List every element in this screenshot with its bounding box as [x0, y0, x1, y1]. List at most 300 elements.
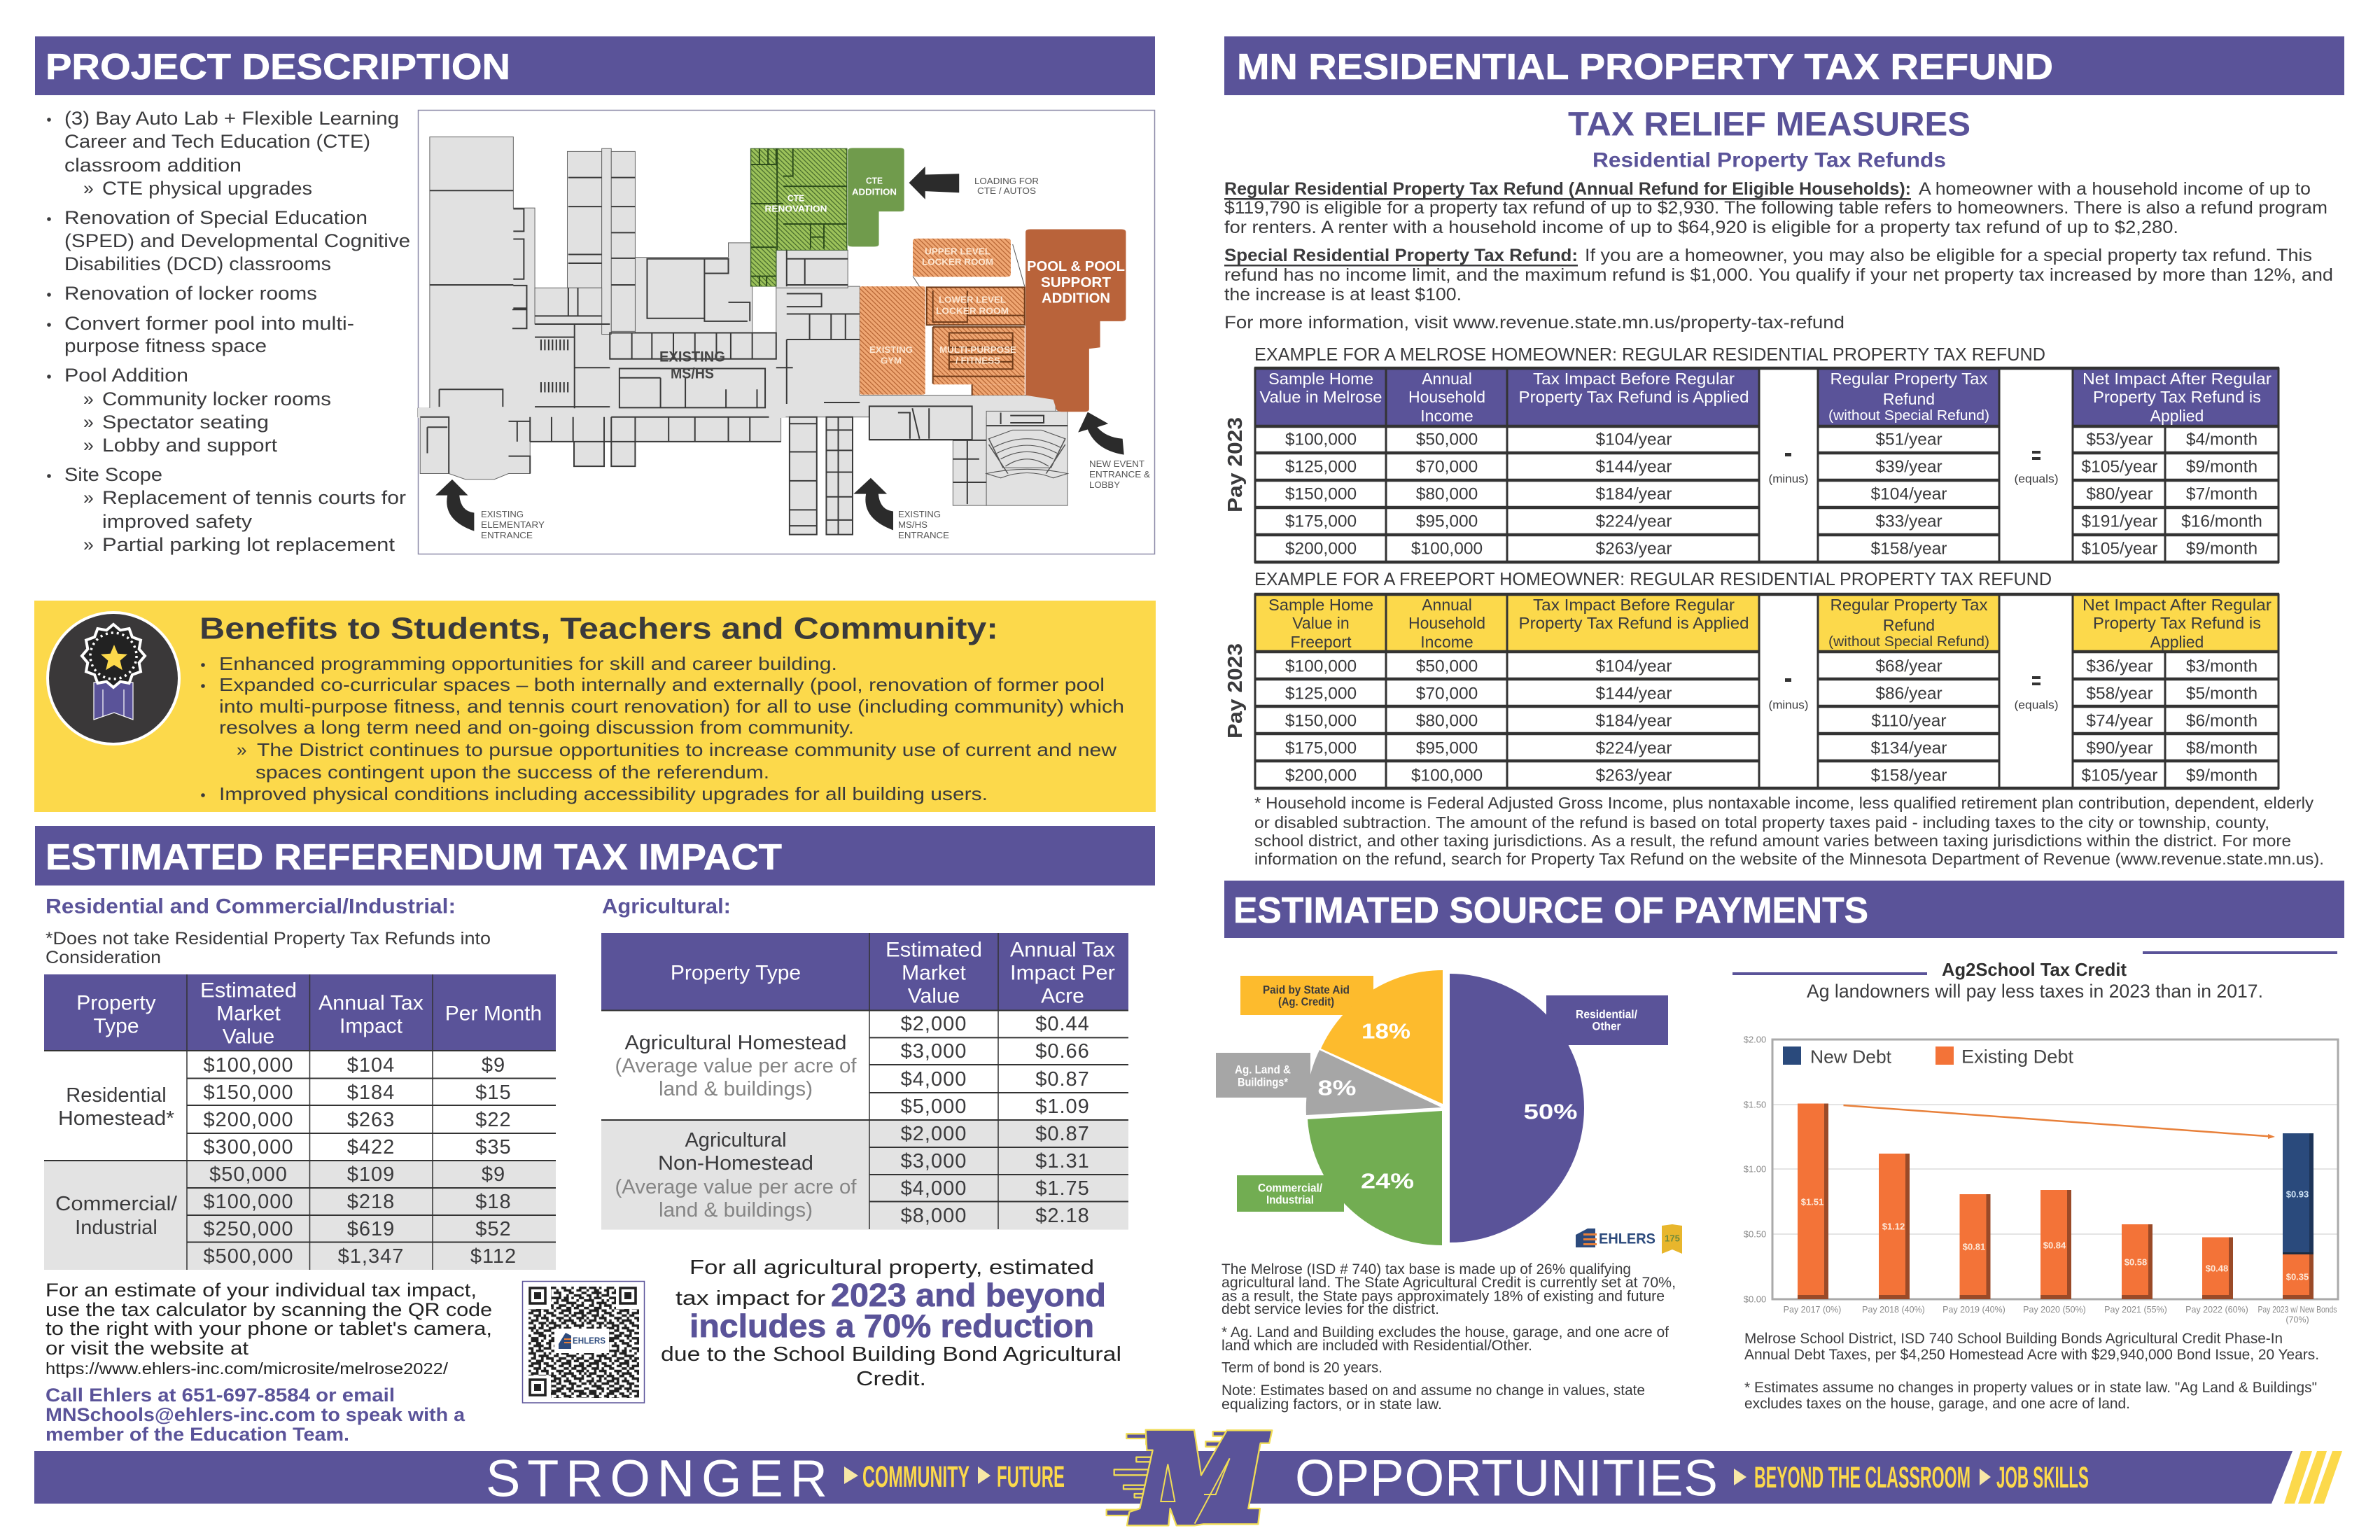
callout: contact Ehlers [46, 1385, 465, 1445]
text block: project scope bullets: » [83, 388, 94, 410]
map labels: EXISTING [481, 510, 524, 519]
table: Melrose homeowner example: Sample Home [1268, 370, 1373, 388]
table: agricultural tax impact: Agricultural Homestead [624, 1032, 847, 1054]
text block: refund explanation: for renters. A renter with a household income of up to $64,920 is eligible for a property tax refund of up to $2,280. [1224, 218, 2178, 237]
text block: household income footnote: information on the refund, search for Property Tax Refund on the website of the Minnesota Department of Revenue (www.revenue.state.mn.us). [1254, 850, 2324, 868]
map labels: EXISTING [869, 344, 913, 355]
text block: project scope bullets: Pool Addition [64, 365, 188, 386]
heading: Melrose example: EXAMPLE FOR A MELROSE HOMEOWNER: REGULAR RESIDENTIAL PROPERTY TAX REFUND [1254, 344, 2045, 365]
table: Melrose homeowner example: $4/month [2186, 430, 2258, 449]
text block: individual estimate instructions [46, 1280, 492, 1378]
heading: source of payments [1224, 881, 2344, 938]
table: agricultural tax impact: Annual Tax [1010, 938, 1115, 962]
table: residential and commercial tax impact: $200,000 [204, 1109, 293, 1131]
icon: award ribbon badge [48, 612, 179, 744]
table: agricultural tax impact: $8,000 [901, 1205, 967, 1227]
table: Freeport homeowner example: Income [1420, 633, 1474, 651]
pie chart: payment sources: Paid by State Aid [1263, 983, 1350, 997]
bar chart: Ag2School debt per acre: $0.35 [2286, 1271, 2309, 1282]
table: Freeport homeowner example: Refund [1883, 616, 1935, 634]
pie chart: payment sources [1216, 970, 1668, 1245]
bar chart: Ag2School debt per acre: $0.84 [2043, 1240, 2066, 1250]
table: Freeport homeowner example: $5/month [2186, 685, 2258, 703]
table: Freeport homeowner example: Annual [1422, 596, 1472, 614]
table: residential and commercial tax impact: Estimated [200, 979, 297, 1002]
table: Melrose homeowner example: Refund [1883, 390, 1935, 408]
table: Melrose homeowner example: $51/year [1875, 430, 1942, 449]
table: Melrose homeowner example: $105/year [2082, 458, 2157, 476]
panel: MN residential property tax refund [1224, 36, 2344, 868]
table: residential and commercial tax impact: $50,000 [209, 1163, 288, 1186]
text block: project scope bullets: » [83, 487, 94, 508]
panel: estimated source of payments [1216, 881, 2344, 1413]
heading: source of payments: ESTIMATED SOURCE OF PAYMENTS [1233, 890, 1868, 931]
table: Melrose homeowner example: $80/year [2086, 484, 2153, 504]
table: Freeport homeowner example: $184/year [1596, 711, 1672, 731]
table: Melrose homeowner example: Household [1408, 388, 1485, 406]
table: residential and commercial tax impact: $100,000 [204, 1054, 293, 1077]
callout: 70 percent reduction: tax impact for [676, 1287, 825, 1310]
text block: benefits bullets: Improved physical conditions including accessibility upgrades for all building users. [219, 783, 988, 804]
table: Melrose homeowner example: Net Impact After Regular [2082, 370, 2272, 388]
table: agricultural tax impact: Impact Per [1010, 962, 1115, 984]
text block: project scope bullets: » [83, 534, 94, 555]
callout: 70 percent reduction [661, 1256, 1121, 1390]
table: residential and commercial tax impact: $18 [475, 1191, 512, 1213]
table: agricultural tax impact: $1.09 [1035, 1096, 1090, 1118]
table: Melrose homeowner example: $100,000 [1411, 539, 1483, 559]
text block: tax base notes: The Melrose (ISD # 740) tax base is made up of 26% qualifying [1222, 1261, 1631, 1278]
pie chart: payment sources: Buildings* [1238, 1075, 1288, 1089]
text block: tax base notes: equalizing factors, or in state law. [1222, 1396, 1442, 1413]
table: residential and commercial tax impact: Type [93, 1015, 139, 1037]
map labels: LOCKER ROOM [936, 305, 1009, 316]
table: residential and commercial tax impact: Annual Tax [318, 991, 424, 1015]
table: Freeport homeowner example: $70,000 [1416, 685, 1478, 703]
logo: Ehlers [1576, 1224, 1682, 1254]
heading: tax refund [1224, 36, 2344, 95]
pool addition shape [1026, 229, 1126, 412]
text block: refund explanation: For more information, visit www.revenue.state.mn.us/property-tax-refund [1224, 313, 1844, 332]
text block: household income footnote: * Household income is Federal Adjusted Gross Income, plus nontaxable income, less qualified retirement plan contribution, dependent, elderly [1254, 794, 2314, 812]
map labels: ENTRANCE [898, 531, 949, 540]
table: residential and commercial tax impact: Homestead* [58, 1107, 174, 1130]
map labels [481, 175, 1151, 540]
label: Pay 2023 Freeport: Pay 2023 [1224, 643, 1247, 738]
table: residential and commercial tax impact: $52 [475, 1218, 512, 1240]
table: Freeport homeowner example: Value in [1292, 614, 1350, 632]
table: agricultural tax impact: (Average value per acre of [615, 1055, 857, 1077]
text block: project scope bullets: improved safety [102, 511, 253, 532]
text block: project scope bullets: Site Scope [64, 464, 162, 485]
text block: chart notes: Melrose School District, ISD 740 School Building Bonds Agricultural Credit Phase-In [1744, 1330, 2283, 1347]
table: Melrose homeowner example: $150,000 [1285, 484, 1357, 504]
table: Freeport homeowner example: Property Tax Refund is Applied [1519, 614, 1749, 632]
table: agricultural tax impact: $5,000 [901, 1096, 967, 1118]
text block: project scope bullets: Replacement of tennis courts for [102, 487, 406, 508]
table: Melrose homeowner example: Income [1420, 407, 1474, 425]
text block: individual estimate instructions: use the tax calculator by scanning the QR code [46, 1299, 492, 1320]
table: residential and commercial tax impact: Residential [66, 1084, 167, 1107]
subheading: residential and commercial: Residential and Commercial/Industrial: [46, 895, 456, 918]
text block: tax base notes: as a result, the State pays approximately 18% of existing and future [1222, 1288, 1665, 1305]
legend: Existing Debt [1961, 1046, 2073, 1067]
text block: tax base notes: debt service levies for the district. [1222, 1301, 1439, 1317]
green addition [848, 148, 904, 246]
table: Freeport homeowner example: Freeport [1291, 633, 1352, 651]
map labels: MULTI-PURPOSE [939, 344, 1016, 355]
table: agricultural tax impact: $3,000 [901, 1150, 967, 1172]
table: Freeport homeowner example: Net Impact After Regular [2082, 596, 2272, 614]
legend: New Debt [1810, 1046, 1892, 1067]
text block: refund explanation: Special Residential Property Tax Refund: [1224, 246, 1578, 265]
table: residential and commercial tax impact: $263 [347, 1109, 395, 1131]
table: agricultural tax impact: Value [908, 984, 960, 1008]
table: Melrose homeowner example: Property Tax Refund is Applied [1519, 388, 1749, 406]
callout: 70 percent reduction: includes a 70% reduction [690, 1308, 1094, 1344]
table: agricultural tax impact: $2,000 [901, 1123, 967, 1145]
table: Freeport homeowner example: Tax Impact Before Regular [1533, 596, 1735, 614]
table: Melrose homeowner example: $100,000 [1285, 430, 1357, 449]
table: agricultural tax impact: Property Type [671, 962, 801, 984]
table: agricultural tax impact: Agricultural [685, 1129, 787, 1152]
slogan: stronger: STRONGER [486, 1449, 827, 1508]
table: Freeport homeowner example: $9/month [2186, 766, 2258, 785]
table: residential and commercial tax impact: Per Month [445, 1002, 542, 1025]
table: Melrose homeowner example: $125,000 [1285, 458, 1357, 476]
table: Melrose homeowner example: $95,000 [1416, 512, 1478, 531]
table: agricultural tax impact: Estimated [886, 938, 982, 962]
text block: individual estimate instructions: For an estimate of your individual tax impact, [46, 1280, 477, 1301]
subheading: agricultural: Agricultural: [602, 895, 731, 918]
callout: 70 percent reduction: Credit. [856, 1368, 926, 1390]
map labels: GYM [881, 356, 902, 365]
table: residential and commercial tax impact: $500,000 [204, 1245, 293, 1268]
text block: chart notes: Annual Debt Taxes, per $4,250 Homestead Acre with $29,940,000 Bond Issue, 20 Years. [1744, 1346, 2319, 1363]
table: agricultural tax impact: $0.87 [1035, 1068, 1090, 1091]
table: agricultural tax impact: $2.18 [1035, 1205, 1090, 1227]
map labels: LOCKER ROOM [922, 256, 993, 267]
table: residential and commercial tax impact: $1,347 [338, 1245, 404, 1268]
map labels: LOBBY [1089, 480, 1121, 490]
M logo [1107, 1430, 1272, 1525]
table: agricultural tax impact: land & buildings) [659, 1078, 813, 1100]
auditorium seating [986, 430, 1068, 478]
table: Freeport homeowner example: $134/year [1871, 739, 1947, 757]
table: residential and commercial tax impact: Industrial [75, 1217, 158, 1239]
text block: tax base notes: * Ag. Land and Building excludes the house, garage, and one acre of [1222, 1324, 1669, 1340]
table: Melrose homeowner example: Applied [2150, 407, 2204, 425]
table: residential and commercial tax impact: $109 [347, 1163, 395, 1186]
map labels: ENTRANCE [481, 531, 533, 540]
map labels: POOL & POOL [1027, 259, 1125, 274]
heading: tax impact [35, 826, 1155, 886]
map labels: MS/HS [898, 520, 927, 530]
arrows [435, 167, 1124, 531]
note: refunds not considered [46, 929, 491, 967]
panel: benefits [34, 601, 1156, 812]
map labels: CTE / AUTOS [977, 186, 1036, 196]
text block: benefits bullets: The District continues to pursue opportunities to increase community use of current and new [257, 739, 1116, 760]
table: Freeport homeowner example: $95,000 [1416, 739, 1478, 757]
table: Freeport homeowner example: $100,000 [1411, 766, 1483, 785]
table: Freeport homeowner example: $125,000 [1285, 685, 1357, 703]
text block: refund explanation: A homeowner with a household income of up to [1919, 179, 2311, 199]
table: Melrose homeowner example: $33/year [1875, 512, 1942, 531]
bar chart: Ag2School debt per acre: $0.81 [1963, 1242, 1985, 1252]
floor plan map [418, 111, 1155, 554]
bar chart: Ag2School debt per acre: $0.48 [2206, 1263, 2228, 1274]
pie chart: payment sources: 24% [1361, 1169, 1414, 1193]
table: Freeport homeowner example: $74/year [2086, 711, 2153, 731]
text block: chart notes [1744, 1330, 2319, 1412]
table: agricultural tax impact: $0.66 [1035, 1040, 1090, 1063]
bar chart: Ag2School debt per acre: Pay 2018 (40%) [1862, 1305, 1925, 1315]
text block: tax base notes: Term of bond is 20 years. [1222, 1359, 1382, 1376]
table: agricultural tax impact: $4,000 [901, 1177, 967, 1200]
table: agricultural tax impact: $0.44 [1035, 1013, 1090, 1035]
map labels: ADDITION [1042, 291, 1110, 307]
table: Freeport homeowner example: $150,000 [1285, 711, 1357, 731]
table: residential and commercial tax impact: $218 [347, 1191, 395, 1213]
text block: project scope bullets: (SPED) and Developmental Cognitive [64, 230, 410, 251]
text block: refund explanation: Regular Residential Property Tax Refund (Annual Refund for Eligible Households): [1224, 179, 1911, 199]
text block: project scope bullets: Disabilities (DCD) classrooms [64, 253, 331, 274]
table: residential and commercial tax impact: $22 [475, 1109, 512, 1131]
subheading: residential property tax refunds: Residential Property Tax Refunds [1592, 148, 1946, 172]
table: residential and commercial tax impact [44, 974, 556, 1270]
table: Freeport homeowner example: $110/year [1871, 711, 1947, 731]
text block: individual estimate instructions: to the right with your phone or tablet's camera, [46, 1318, 492, 1339]
pie chart: payment sources: Commercial/ [1258, 1182, 1322, 1194]
table: agricultural tax impact: (Average value per acre of [615, 1176, 857, 1198]
table: Melrose homeowner example: $144/year [1596, 458, 1672, 476]
bar chart: Ag2School debt per acre: $1.51 [1801, 1197, 1823, 1207]
table: residential and commercial tax impact: $250,000 [204, 1218, 293, 1240]
table: Freeport homeowner example: $90/year [2086, 739, 2153, 757]
pie chart: payment sources: Other [1592, 1019, 1621, 1033]
text block: refund explanation: $119,790 is eligible for a property tax refund of up to $2,930. The following table refers to homeowners. There is also a refund program [1224, 198, 2328, 218]
table: Melrose homeowner example: $263/year [1596, 539, 1672, 559]
label: Pay 2023 Melrose: Pay 2023 [1224, 417, 1247, 512]
bar chart: Ag2School debt per acre: Pay 2021 (55%) [2104, 1305, 2167, 1315]
text block: individual estimate instructions: or visit the website at [46, 1338, 249, 1359]
table: agricultural tax impact: $1.31 [1035, 1150, 1090, 1172]
QR code: EHLERS [573, 1336, 606, 1345]
text block: project scope bullets: » [83, 178, 94, 199]
bar chart: Ag2School debt per acre: $1.00 [1744, 1163, 1766, 1175]
table: agricultural tax impact: Non-Homestead [658, 1152, 813, 1175]
pie chart: payment sources: Ag. Land & [1235, 1063, 1291, 1077]
map labels: CTE [866, 175, 883, 186]
text block: project scope bullets: » [83, 412, 94, 433]
heading: project description: PROJECT DESCRIPTION [46, 47, 510, 88]
table: Freeport homeowner example: $80,000 [1416, 711, 1478, 731]
text block: tax base notes: agricultural land. The State Agricultural Credit is currently set at 70%, [1222, 1274, 1676, 1291]
table: Melrose homeowner example: $158/year [1871, 539, 1947, 559]
note: refunds not considered: Consideration [46, 948, 161, 967]
table: Freeport homeowner example: Applied [2150, 633, 2204, 651]
table: residential and commercial tax impact: Value [223, 1025, 274, 1049]
text block: project scope bullets: purpose fitness space [64, 335, 267, 356]
table: Freeport homeowner example: $263/year [1596, 766, 1672, 785]
text block: refund explanation: the increase is at least $100. [1224, 285, 1462, 304]
table: Freeport homeowner example: Regular Property Tax [1830, 596, 1988, 614]
callout: 70 percent reduction: due to the School Building Bond Agricultural [661, 1343, 1121, 1366]
table: Melrose homeowner example: $184/year [1596, 484, 1672, 504]
callout: 70 percent reduction: For all agricultural property, estimated [690, 1256, 1094, 1279]
callout: 70 percent reduction: 2023 and beyond [831, 1277, 1106, 1313]
table: residential and commercial tax impact: Impact [340, 1015, 403, 1037]
heading: project description [35, 36, 1155, 95]
text block: project scope bullets: CTE physical upgrades [102, 178, 312, 199]
map labels: EXISTING [898, 510, 941, 519]
bar chart: Ag2School debt per acre: Pay 2023 w/ New Bonds [2258, 1305, 2337, 1315]
table: agricultural tax impact: $2,000 [901, 1013, 967, 1035]
table: residential and commercial tax impact: $300,000 [204, 1136, 293, 1158]
pie chart: payment sources: 18% [1362, 1019, 1410, 1043]
bar chart: Ag2School debt per acre [1744, 1035, 2338, 1324]
text block: benefits bullets: » [237, 739, 246, 760]
table: Freeport homeowner example: (equals) [2015, 699, 2058, 711]
map labels: SUPPORT [1041, 275, 1111, 290]
bleachers [541, 340, 568, 392]
table: residential and commercial tax impact: $112 [470, 1245, 517, 1268]
table: agricultural tax impact [601, 933, 1128, 1230]
table: residential and commercial tax impact: $619 [347, 1218, 395, 1240]
text block: project scope bullets [47, 108, 410, 555]
table: Freeport homeowner example: $200,000 [1285, 766, 1357, 785]
callout: contact Ehlers: member of the Education Team. [46, 1424, 349, 1445]
heading: Freeport example: EXAMPLE FOR A FREEPORT HOMEOWNER: REGULAR RESIDENTIAL PROPERTY TAX REFUND [1254, 568, 2052, 589]
text block: project scope bullets: Lobby and support [102, 435, 278, 456]
text block: refund explanation [1224, 179, 2333, 332]
map labels: MS/HS [671, 365, 714, 382]
heading: benefits: Benefits to Students, Teachers and Community: [200, 612, 998, 645]
table: Melrose homeowner example: $105/year [2082, 539, 2157, 559]
table: Melrose homeowner example: $7/month [2186, 484, 2258, 504]
text block: project scope bullets: Renovation of Special Education [64, 207, 368, 228]
table: Freeport homeowner example [1254, 594, 2279, 789]
slogan: beyond the classroom and job skills: BEYOND THE CLASSROOM [1754, 1461, 1970, 1494]
table: residential and commercial tax impact: Market [216, 1002, 281, 1025]
text block: benefits bullets: spaces contingent upon the success of the referendum. [255, 762, 769, 783]
text block: project scope bullets: » [83, 435, 94, 456]
pie chart: payment sources: (Ag. Credit) [1278, 995, 1334, 1008]
logo: Ehlers: EHLERS [1599, 1231, 1656, 1247]
table: Freeport homeowner example: Property Tax Refund is [2093, 614, 2261, 632]
map labels: UPPER LEVEL [925, 246, 990, 256]
table: Melrose homeowner example: (equals) [2015, 472, 2058, 486]
table: residential and commercial tax impact: $9 [482, 1163, 505, 1186]
table: residential and commercial tax impact: $9 [482, 1054, 505, 1077]
table: Melrose homeowner example: $224/year [1596, 512, 1672, 531]
table: agricultural tax impact: Market [902, 962, 967, 984]
chart title: Ag2School Tax Credit: Ag2School Tax Credit [1942, 959, 2127, 980]
table: Freeport homeowner example: $105/year [2082, 766, 2157, 785]
decorative yellow stripes [2284, 1451, 2342, 1504]
table: residential and commercial tax impact: $104 [347, 1054, 395, 1077]
table: Melrose homeowner example: $50,000 [1416, 430, 1478, 449]
table: residential and commercial tax impact: $150,000 [204, 1082, 293, 1104]
table: Freeport homeowner example: $104/year [1596, 657, 1672, 676]
text block: project scope bullets: Partial parking lot replacement [102, 534, 396, 555]
table: Melrose homeowner example: $104/year [1596, 430, 1672, 449]
logo: Ehlers: 175 [1665, 1233, 1680, 1243]
table: Freeport homeowner example: Sample Home [1268, 596, 1373, 614]
table: agricultural tax impact: $1.75 [1035, 1177, 1090, 1200]
map labels: RENOVATION [764, 203, 827, 214]
text block: benefits bullets: Enhanced programming opportunities for skill and career building. [219, 653, 837, 674]
text block: refund explanation: refund has no income limit, and the maximum refund is $1,000. You qualify if your net property tax increased by more than 12%, and [1224, 265, 2333, 285]
heading: tax impact: ESTIMATED REFERENDUM TAX IMPACT [46, 837, 782, 878]
text block: project scope bullets: Convert former pool into multi- [64, 313, 354, 334]
text block: individual estimate instructions: https://www.ehlers-inc.com/microsite/melrose2022/ [46, 1359, 449, 1378]
pie chart: payment sources: Industrial [1266, 1193, 1314, 1207]
table: Melrose homeowner example: Tax Impact Before Regular [1533, 370, 1735, 388]
table: Melrose homeowner example: $9/month [2186, 458, 2258, 476]
text block: household income footnote [1254, 794, 2324, 868]
orange hatched [913, 239, 1011, 276]
bar chart: Ag2School debt per acre: $0.93 [2286, 1189, 2309, 1200]
text block: project scope bullets: Career and Tech Education (CTE) [64, 131, 370, 152]
map labels: ELEMENTARY [481, 520, 545, 530]
table: Freeport homeowner example: $58/year [2086, 685, 2153, 703]
table: Freeport homeowner example: $3/month [2186, 657, 2258, 676]
text block: project scope bullets: (3) Bay Auto Lab + Flexible Learning [64, 108, 399, 129]
table: Freeport homeowner example: $175,000 [1285, 739, 1357, 757]
table: Melrose homeowner example: $9/month [2186, 539, 2258, 559]
bar chart: Ag2School debt per acre: $0.50 [1744, 1229, 1766, 1239]
text block: refund explanation: If you are a homeowner, you may also be eligible for a special property tax refund. This [1585, 246, 2312, 265]
bar chart: Ag2School debt per acre: Pay 2019 (40%) [1942, 1305, 2005, 1315]
table: Melrose homeowner example: $39/year [1875, 458, 1942, 476]
pie chart: payment sources: Residential/ [1576, 1008, 1637, 1021]
chart title: Ag2School Tax Credit [1732, 953, 2337, 1002]
slogan: opportunities: OPPORTUNITIES [1295, 1450, 1718, 1506]
table: Freeport homeowner example: $158/year [1871, 766, 1947, 785]
text block: tax base notes: Note: Estimates based on and assume no change in values, state [1222, 1382, 1645, 1399]
text block: chart notes: * Estimates assume no changes in property values or in state law. "Ag Land & Buildings" [1744, 1379, 2317, 1396]
table: agricultural tax impact: land & buildings) [659, 1199, 813, 1222]
table: Freeport homeowner example: $8/month [2186, 739, 2258, 757]
slogan: community and future: FUTURE [997, 1460, 1065, 1494]
text block: tax base notes [1222, 1261, 1676, 1413]
text block: household income footnote: or disabled subtraction. The amount of the refund is based on total property taxes paid - including taxes to the city or township, county, [1254, 813, 2269, 832]
table: Melrose homeowner example: (without Special Refund) [1828, 408, 1989, 424]
table: agricultural tax impact: $4,000 [901, 1068, 967, 1091]
bar chart: Ag2School debt per acre: $1.12 [1882, 1221, 1905, 1232]
map labels: EXISTING [659, 349, 725, 365]
table: residential and commercial tax impact: $184 [347, 1082, 395, 1104]
text block: project scope bullets: classroom addition [64, 155, 241, 176]
table: Melrose homeowner example: $80,000 [1416, 484, 1478, 504]
table: residential and commercial tax impact: $15 [475, 1082, 512, 1104]
panel: project description [35, 36, 1155, 555]
pie chart: payment sources: 8% [1317, 1075, 1357, 1100]
table: Melrose homeowner example: Property Tax Refund is [2093, 388, 2261, 406]
panel: estimated referendum tax impact [35, 826, 1155, 1445]
table: Melrose homeowner example: $104/year [1871, 484, 1947, 504]
text block: project scope bullets: Renovation of locker rooms [64, 283, 317, 304]
map labels: NEW EVENT [1089, 459, 1144, 469]
table: Melrose homeowner example: $200,000 [1285, 539, 1357, 559]
table: Freeport homeowner example: $144/year [1596, 685, 1672, 703]
text block: chart notes: excludes taxes on the house, garage, and one acre of land. [1744, 1395, 2130, 1412]
table: agricultural tax impact: $3,000 [901, 1040, 967, 1063]
chart title: Ag2School Tax Credit: Ag landowners will pay less taxes in 2023 than in 2017. [1807, 981, 2263, 1002]
text block: benefits bullets [201, 653, 1124, 804]
